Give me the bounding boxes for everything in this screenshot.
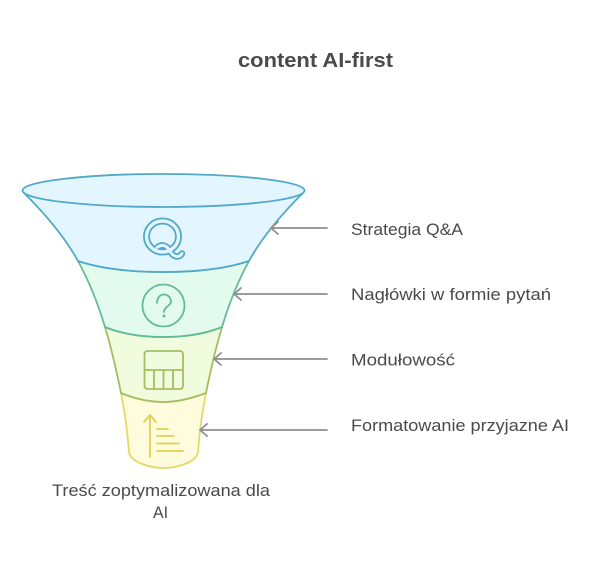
title: content AI-first [238,50,393,72]
icon: modular table [144,351,183,389]
funnel segment: Q&A (blue) [24,193,303,272]
label: Nagłówki w formie pytań: Nagłówki w formie pytań [351,285,551,304]
label: Modułowość: Modułowość [351,350,456,370]
arrow: Formatowanie przyjazne AI [200,424,327,436]
funnel segment: formatting (yellow) [121,393,206,468]
funnel segment: headings (green) [78,261,249,337]
funnel output caption: AI [153,503,168,522]
arrow: Modułowość [214,353,327,365]
label: Strategia Q&A: Strategia Q&A [351,220,464,239]
arrow: Nagłówki w formie pytań [234,288,327,300]
funnel top rim [22,174,304,207]
icon: question mark in circle [142,284,184,326]
icon: ascending list arrow [144,415,183,457]
funnel [22,174,304,468]
label: Formatowanie przyjazne AI: Formatowanie przyjazne AI [351,416,569,435]
funnel output caption: Treść zoptymalizowana dla [52,481,271,500]
funnel segment: modularity (lime) [105,327,222,402]
arrow: Strategia Q&A [271,222,327,234]
icon: letter Q [146,221,182,257]
funnel output caption [52,481,271,522]
